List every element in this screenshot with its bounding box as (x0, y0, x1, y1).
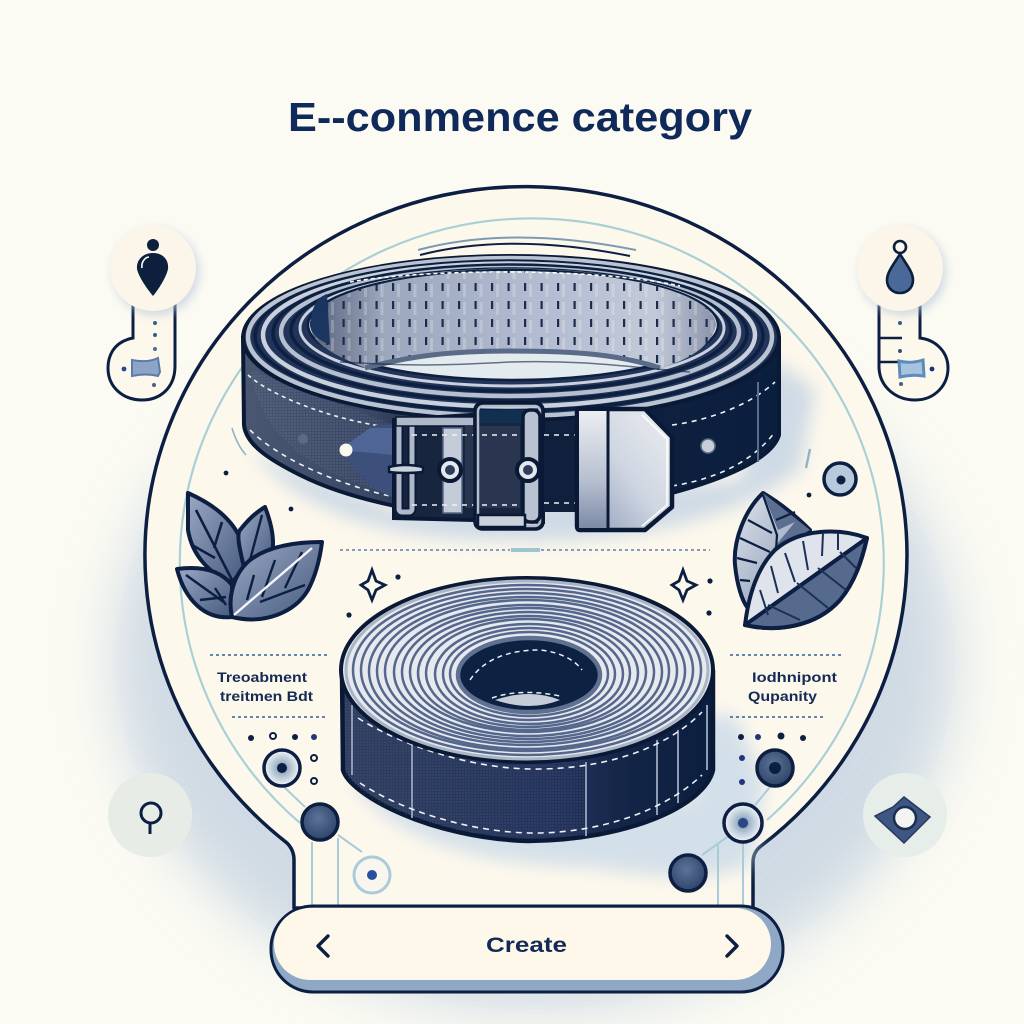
icon: top left pendant bubble (108, 225, 199, 400)
text block: left label: Treoabment (217, 669, 307, 685)
roll side (342, 672, 713, 841)
capsule: right tab (879, 300, 948, 400)
button: right eye stud (824, 463, 856, 495)
belt buckle frame right (439, 404, 578, 528)
roll top spiral (341, 578, 713, 762)
dot grid: left (248, 733, 317, 784)
capsule: left tab (108, 300, 175, 400)
panel: main device frame (145, 187, 907, 908)
circuit lines (283, 786, 770, 905)
belt rivet (701, 439, 715, 453)
leaf back (188, 493, 246, 582)
leaf front (231, 542, 322, 619)
icon: left leaves (177, 493, 322, 619)
belt inner wall (310, 271, 716, 372)
text block: left label: treitmen Bdt (220, 688, 313, 704)
icon: right chevron (727, 936, 737, 956)
buttons: studs (264, 750, 793, 893)
text block: left label (210, 655, 327, 717)
roll centre hole (458, 638, 600, 712)
chart-like deco: arcs above belt (232, 238, 810, 468)
shadow: belt drop shadow (250, 360, 815, 541)
belt diamond keeper (298, 425, 394, 498)
text block: right label (730, 655, 843, 717)
leaf lower left (177, 568, 232, 617)
leaf back right (735, 493, 810, 607)
label: create: Create (486, 934, 567, 957)
dot grid: right (738, 732, 806, 785)
belt tip clip (577, 409, 672, 530)
icon: top right drop bubble (857, 225, 948, 400)
belt side band (243, 338, 779, 512)
icon: bottom left pin bubble (108, 773, 192, 857)
icon: bottom right diamond bubble (863, 773, 947, 857)
illustration: rolled belt (341, 578, 713, 841)
leaf small (238, 507, 273, 572)
leaf front right (745, 532, 867, 628)
belt buckle frame left (389, 412, 543, 522)
text block: right label: Qupanity (748, 688, 817, 704)
icon: left chevron (318, 936, 328, 956)
icon: right leaves (735, 493, 867, 628)
button: create (271, 906, 783, 992)
text block: right label: Iodhnipont (752, 669, 837, 685)
title: E--conmence category (288, 94, 752, 140)
divider: dashed centre line (340, 548, 710, 552)
illustration: coiled belt (243, 256, 779, 530)
belt coils (243, 256, 779, 420)
icon: sparkles and dots (224, 471, 811, 618)
shadow: roll drop shadow (350, 715, 765, 876)
belt inner opening (308, 270, 718, 380)
